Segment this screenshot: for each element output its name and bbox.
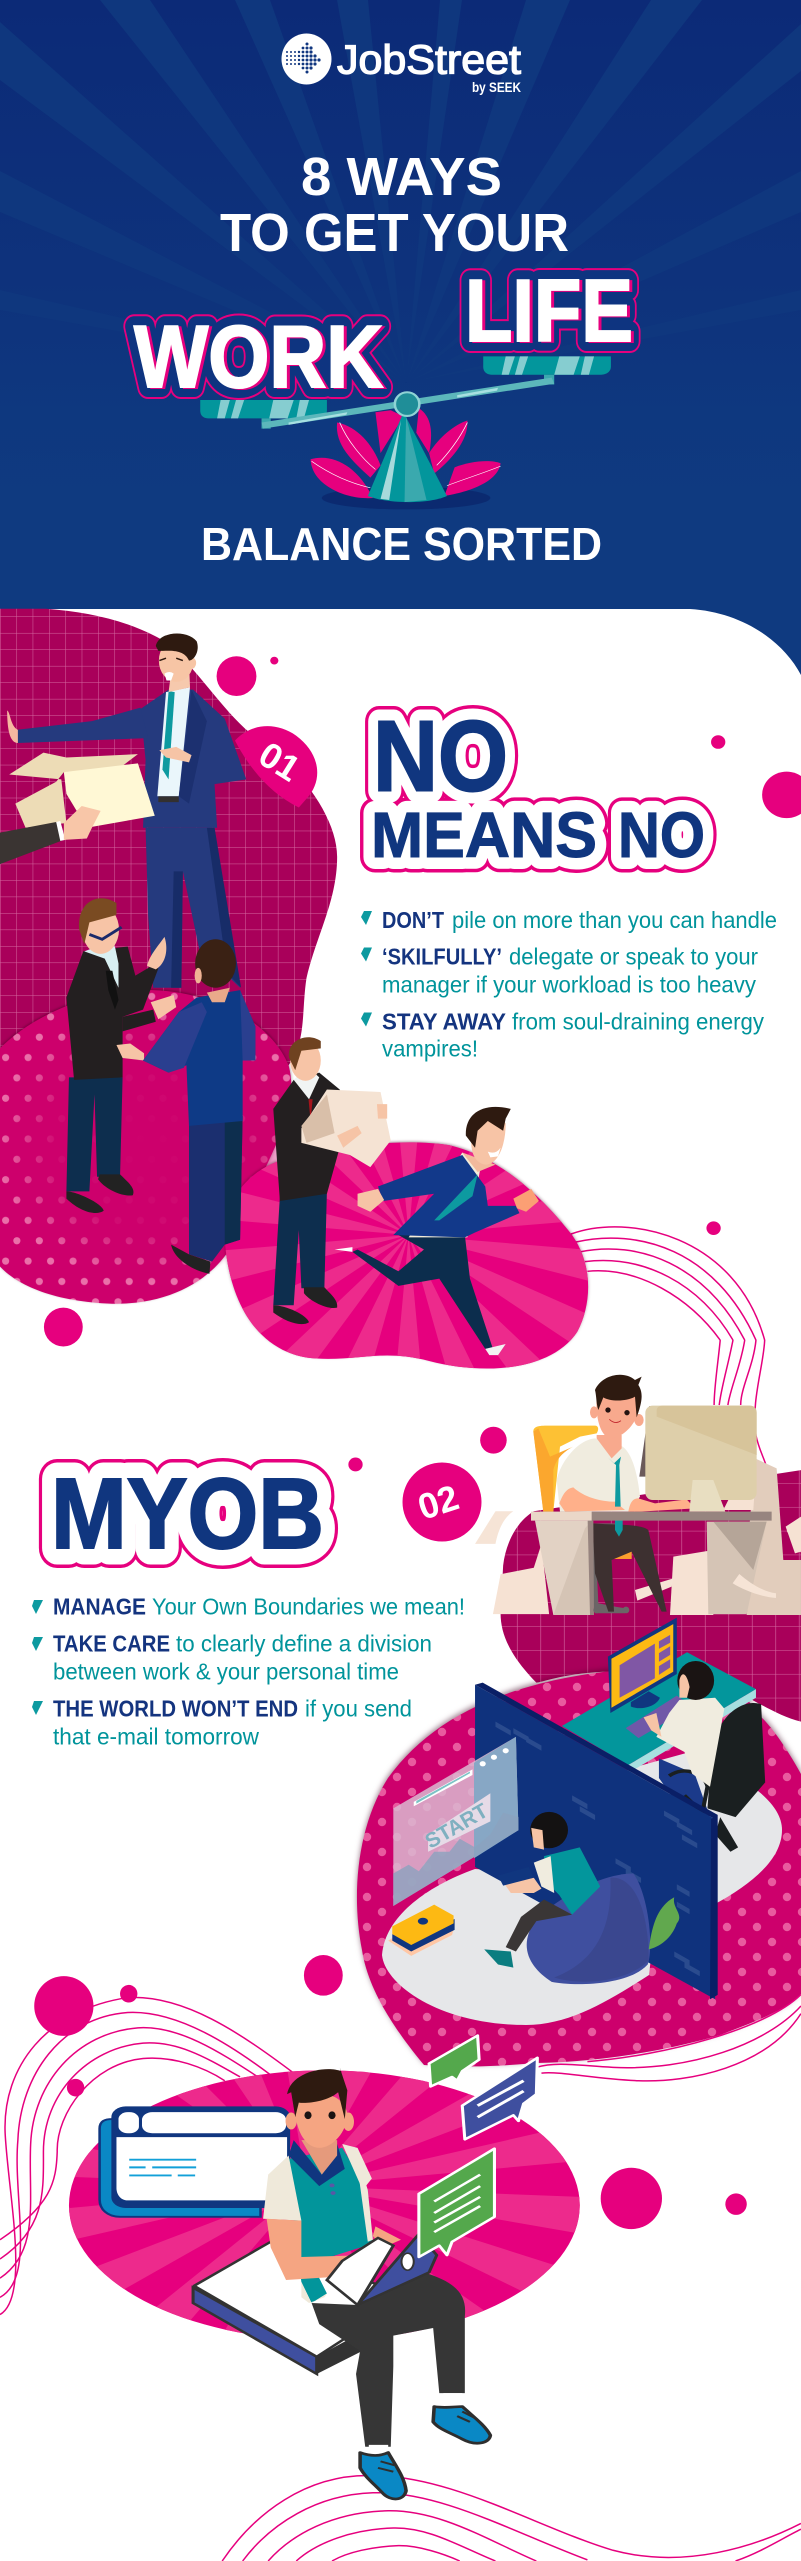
heading: NO MEANS NO: MEANS	[371, 799, 597, 871]
bullet list: section 01: delegate or speak to your	[509, 944, 758, 970]
title	[201, 147, 602, 570]
pink accent dots	[44, 656, 801, 1346]
heading: WORK: WORK	[134, 307, 383, 406]
heading: NO MEANS NO: MEANS	[371, 799, 597, 871]
heading: NO MEANS NO: NO	[373, 700, 508, 812]
bullet list: section 02: TAKE CARE	[53, 1630, 170, 1656]
decorative waves left	[0, 1994, 801, 2315]
heading: WORK: WORK	[134, 307, 383, 406]
title: 8 WAYS	[301, 147, 502, 207]
bullet list: section 02: if you send	[305, 1696, 412, 1722]
heading: MYOB: MYOB	[51, 1458, 324, 1570]
badge label: 01: 01	[252, 733, 307, 789]
heading: WORK: WORK	[137, 308, 386, 407]
bullet list: section 01: DON’T	[382, 907, 444, 933]
heading: NO MEANS NO: NO	[618, 799, 705, 871]
icon: blue chat bubble	[462, 2058, 537, 2139]
game label: START: START	[421, 1799, 492, 1853]
badge: 02: 02	[413, 1476, 464, 1528]
heading: NO MEANS NO	[371, 700, 705, 871]
bullet list: section 01	[361, 907, 777, 1062]
game screen	[393, 1737, 518, 1906]
bullet list: section 01: ‘SKILFULLY’	[382, 944, 502, 970]
bullet list: section 01: from soul-draining energy	[512, 1008, 764, 1034]
figure: man at computer from behind	[644, 1661, 765, 1852]
icon: browser window	[100, 2106, 290, 2217]
bullet list: section 01: pile on more than you can handle	[452, 907, 777, 933]
bullet list: section 02	[32, 1594, 465, 1750]
panel: section 03 illustration	[0, 1955, 801, 2561]
header panel	[0, 0, 801, 675]
icon: balance scale	[200, 356, 611, 509]
logo: JobStreet	[282, 34, 522, 95]
bullet list: section 02: Your Own Boundaries we mean!	[152, 1594, 465, 1620]
panel: section 02 cubicle illustration	[357, 1618, 801, 2066]
pink accent dots	[34, 1955, 747, 2229]
heading: NO MEANS NO: NO	[373, 700, 508, 812]
bullet list: section 01: vampires!	[382, 1036, 478, 1062]
figure: man carrying boxes	[273, 1037, 391, 1324]
icon: game console box	[388, 1905, 455, 1956]
figure: man saying no	[7, 633, 246, 988]
heading: MYOB: MYOB	[51, 1458, 324, 1570]
badge: 02	[402, 1462, 482, 1542]
figure: man at desk with monitor	[531, 1375, 801, 1615]
icon: computer desk	[562, 1618, 756, 1774]
figure: man seated on book with laptop	[193, 2067, 490, 2499]
bullet list: section 01: manager if your workload is too heavy	[382, 972, 756, 998]
decorative waves bottom	[222, 2475, 801, 2561]
heading: LIFE: LIFE	[465, 261, 633, 360]
figure: man in blue jacket from behind	[143, 939, 255, 1274]
heading: NO MEANS NO: NO	[618, 799, 705, 871]
heading: MYOB: MYOB	[51, 1458, 324, 1570]
heading: NO MEANS NO: NO	[373, 700, 508, 812]
logo: JobStreet: JobStreet	[337, 36, 522, 82]
bullet list: section 02: to clearly define a division	[176, 1630, 432, 1656]
icon: papers pushed by hand	[0, 753, 155, 864]
wall	[475, 1685, 715, 1999]
heading: NO MEANS NO: MEANS	[371, 799, 597, 871]
bullet list: section 02: between work & your personal time	[53, 1659, 399, 1685]
logo: JobStreet: by SEEK	[472, 79, 521, 95]
panel: section 01 illustration	[0, 608, 801, 1369]
pink accent dots: section 02	[348, 1427, 507, 1471]
title: BALANCE SORTED	[201, 518, 602, 570]
title: TO GET YOUR	[220, 203, 569, 263]
bullet list: section 02: MANAGE	[53, 1594, 146, 1620]
heading: LIFE: LIFE	[468, 262, 636, 361]
bullet list: section 02: that e-mail tomorrow	[53, 1724, 259, 1750]
bullet list: section 02: THE WORLD WON’T END	[53, 1696, 298, 1722]
badge: 01	[235, 726, 317, 807]
sunburst ellipse	[68, 2070, 580, 2335]
icon: small green chat bubble	[429, 2036, 479, 2086]
figure: man in black suit with glasses	[66, 898, 176, 1213]
icon: large green chat bubble	[419, 2149, 494, 2257]
heading: LIFE: LIFE	[465, 261, 633, 360]
heading: NO MEANS NO: NO	[618, 799, 705, 871]
gamer in bean bag	[484, 1812, 650, 1984]
panel: section 02 office illustration	[475, 1340, 801, 1722]
heading: LIFE: LIFE	[465, 261, 633, 360]
bullet list: section 01: STAY AWAY	[382, 1008, 506, 1034]
figure: man running away	[335, 1107, 539, 1355]
icon: leaf	[649, 1897, 679, 1949]
heading: WORK: WORK	[134, 307, 383, 406]
